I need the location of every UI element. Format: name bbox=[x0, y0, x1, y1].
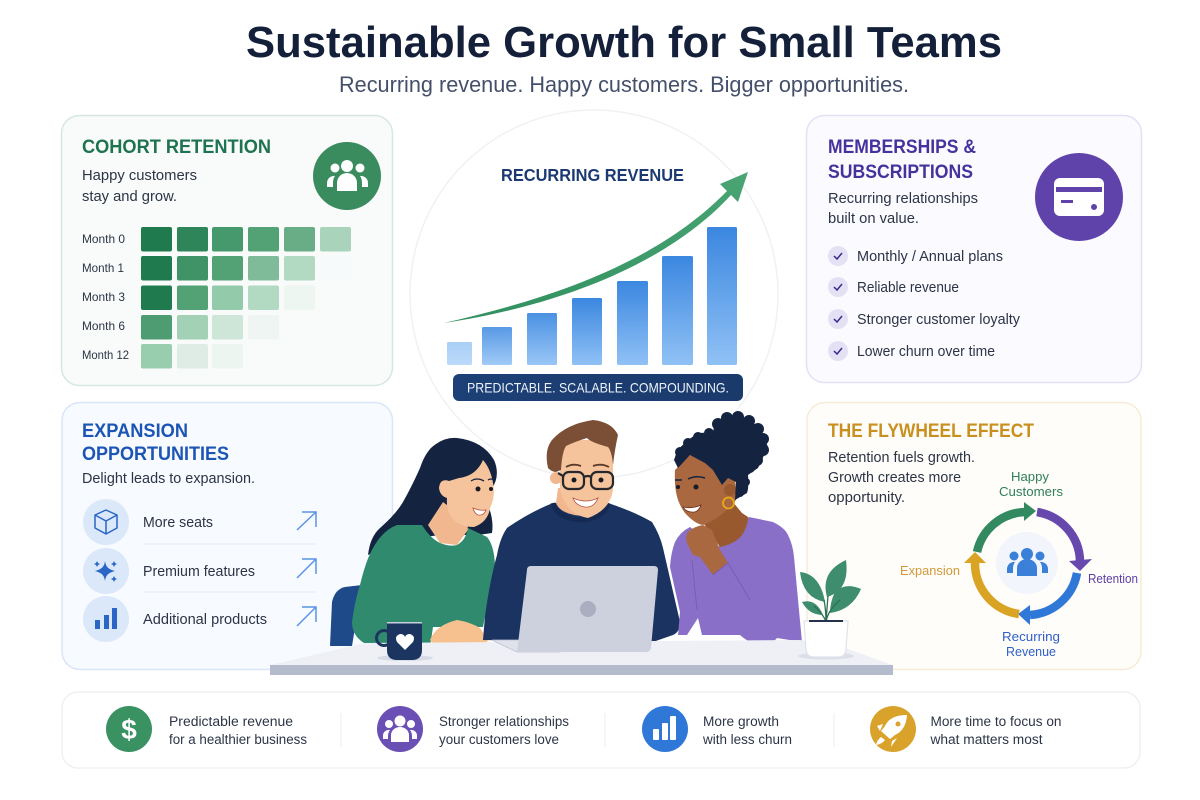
icon: credit card bbox=[1035, 153, 1123, 241]
text: flywheel description: opportunity. bbox=[828, 490, 905, 506]
heatmap: cohort retention grid bbox=[82, 227, 351, 368]
panel: memberships and subscriptions bbox=[806, 116, 1142, 382]
arrows: expansion trend bbox=[297, 512, 316, 626]
panel: recurring revenue circle bbox=[410, 110, 778, 478]
list: expansion items: More seats bbox=[143, 515, 213, 531]
text: memberships description: built on value. bbox=[828, 211, 919, 227]
person: man in navy bbox=[483, 420, 680, 643]
heading: recurring revenue: RECURRING REVENUE bbox=[501, 165, 684, 185]
heading: expansion opportunities: EXPANSION bbox=[82, 421, 188, 442]
heatmap: cohort retention grid: Month 1 bbox=[82, 261, 124, 275]
label: recurring revenue: Recurring bbox=[1002, 629, 1060, 644]
heading: memberships and subscriptions: SUBSCRIPTIONS bbox=[828, 162, 973, 183]
heading: memberships and subscriptions: MEMBERSHIPS & bbox=[828, 137, 976, 158]
arrow: gold segment bbox=[964, 552, 1019, 614]
list: membership benefits bbox=[828, 246, 1021, 361]
arrow: green segment bbox=[977, 502, 1036, 552]
benefit: stronger relationships: Stronger relationships bbox=[439, 714, 569, 729]
arrow: purple segment bbox=[1037, 512, 1092, 571]
icon: premium sparkles bbox=[83, 548, 129, 594]
label: happy customers: Customers bbox=[999, 485, 1063, 499]
text: flywheel description: Growth creates more bbox=[828, 470, 961, 486]
icon: customers group bbox=[313, 142, 381, 210]
illustration: team at laptop bbox=[270, 411, 893, 675]
label: happy customers: Happy bbox=[1011, 470, 1050, 484]
benefit: stronger relationships: your customers love bbox=[439, 732, 559, 747]
icon: seats box bbox=[83, 499, 129, 545]
table bbox=[270, 640, 893, 675]
benefit: more growth: with less churn bbox=[702, 732, 792, 747]
text: flywheel description bbox=[828, 450, 975, 506]
icon: products bars bbox=[83, 596, 129, 642]
laptop bbox=[492, 566, 658, 652]
heatmap: cohort retention grid: Month 0 bbox=[82, 232, 125, 246]
list: membership benefits: Lower churn over time bbox=[857, 344, 995, 360]
benefit: more growth bbox=[642, 706, 792, 752]
heading: memberships and subscriptions bbox=[828, 137, 976, 183]
list: expansion items: Premium features bbox=[143, 564, 255, 580]
hair: bun and curls bbox=[674, 411, 769, 500]
heatmap: cohort retention grid: Month 3 bbox=[82, 290, 125, 304]
heading: flywheel effect: THE FLYWHEEL EFFECT bbox=[828, 421, 1034, 442]
heading: expansion opportunities bbox=[82, 421, 229, 465]
arrow: growth trend bbox=[444, 172, 748, 323]
banner: predictable scalable compounding: PREDICTABLE. SCALABLE. COMPOUNDING. bbox=[467, 380, 729, 396]
benefit: more time: what matters most bbox=[929, 732, 1043, 747]
heading: cohort retention: COHORT RETENTION bbox=[82, 137, 271, 158]
text: cohort description: Happy customers bbox=[82, 168, 197, 184]
text: expansion description: Delight leads to expansion. bbox=[82, 471, 255, 487]
benefit: predictable revenue: Predictable revenue bbox=[169, 714, 293, 729]
banner: predictable scalable compounding bbox=[453, 374, 743, 401]
person: woman in purple bbox=[670, 411, 802, 646]
person: woman in green bbox=[352, 438, 497, 647]
chair bbox=[330, 585, 362, 646]
benefit: more time: More time to focus on bbox=[930, 714, 1062, 729]
text: cohort description: stay and grow. bbox=[82, 189, 177, 205]
benefit: more growth: More growth bbox=[703, 714, 779, 729]
arrow: blue segment bbox=[1018, 573, 1077, 625]
text: memberships description: Recurring relationships bbox=[828, 191, 978, 207]
icon: potted plant bbox=[798, 560, 861, 660]
list: expansion items: Additional products bbox=[143, 612, 267, 628]
icon: coffee mug bbox=[376, 622, 433, 661]
benefit: predictable revenue: $ bbox=[121, 714, 137, 745]
heading: expansion opportunities: OPPORTUNITIES bbox=[82, 444, 229, 465]
text: flywheel description: Retention fuels growth. bbox=[828, 450, 975, 466]
icon: flywheel customers bbox=[1007, 548, 1048, 576]
label: happy customers bbox=[999, 470, 1063, 499]
list: membership benefits: Stronger customer loyalty bbox=[857, 312, 1021, 328]
benefit: predictable revenue bbox=[106, 706, 307, 752]
list: membership benefits: Reliable revenue bbox=[857, 280, 959, 296]
text: memberships description bbox=[828, 191, 978, 227]
label: retention: Retention bbox=[1088, 571, 1138, 586]
panel: cohort retention bbox=[62, 116, 392, 386]
heatmap: cohort retention grid: Month 6 bbox=[82, 319, 125, 333]
subtitle: Recurring revenue. Happy customers. Bigger opportunities. bbox=[339, 72, 909, 97]
text: cohort description bbox=[82, 168, 197, 205]
benefit: predictable revenue: for a healthier business bbox=[169, 732, 307, 747]
panel: flywheel effect bbox=[807, 402, 1141, 670]
label: recurring revenue bbox=[1002, 629, 1060, 659]
benefit: stronger relationships bbox=[377, 706, 569, 752]
panel: expansion opportunities bbox=[62, 402, 392, 670]
panel: benefits footer bbox=[62, 692, 1140, 768]
bar chart: revenue growth bbox=[447, 227, 737, 365]
list: membership benefits: Monthly / Annual plans bbox=[857, 249, 1003, 265]
list: expansion items bbox=[143, 515, 316, 628]
heatmap: cohort retention grid: Month 12 bbox=[82, 348, 129, 362]
label: expansion: Expansion bbox=[900, 563, 960, 578]
benefit: more time bbox=[870, 706, 1062, 752]
diagram: flywheel cycle bbox=[900, 470, 1138, 659]
label: recurring revenue: Revenue bbox=[1006, 644, 1056, 659]
title: Sustainable Growth for Small Teams bbox=[246, 18, 1002, 67]
